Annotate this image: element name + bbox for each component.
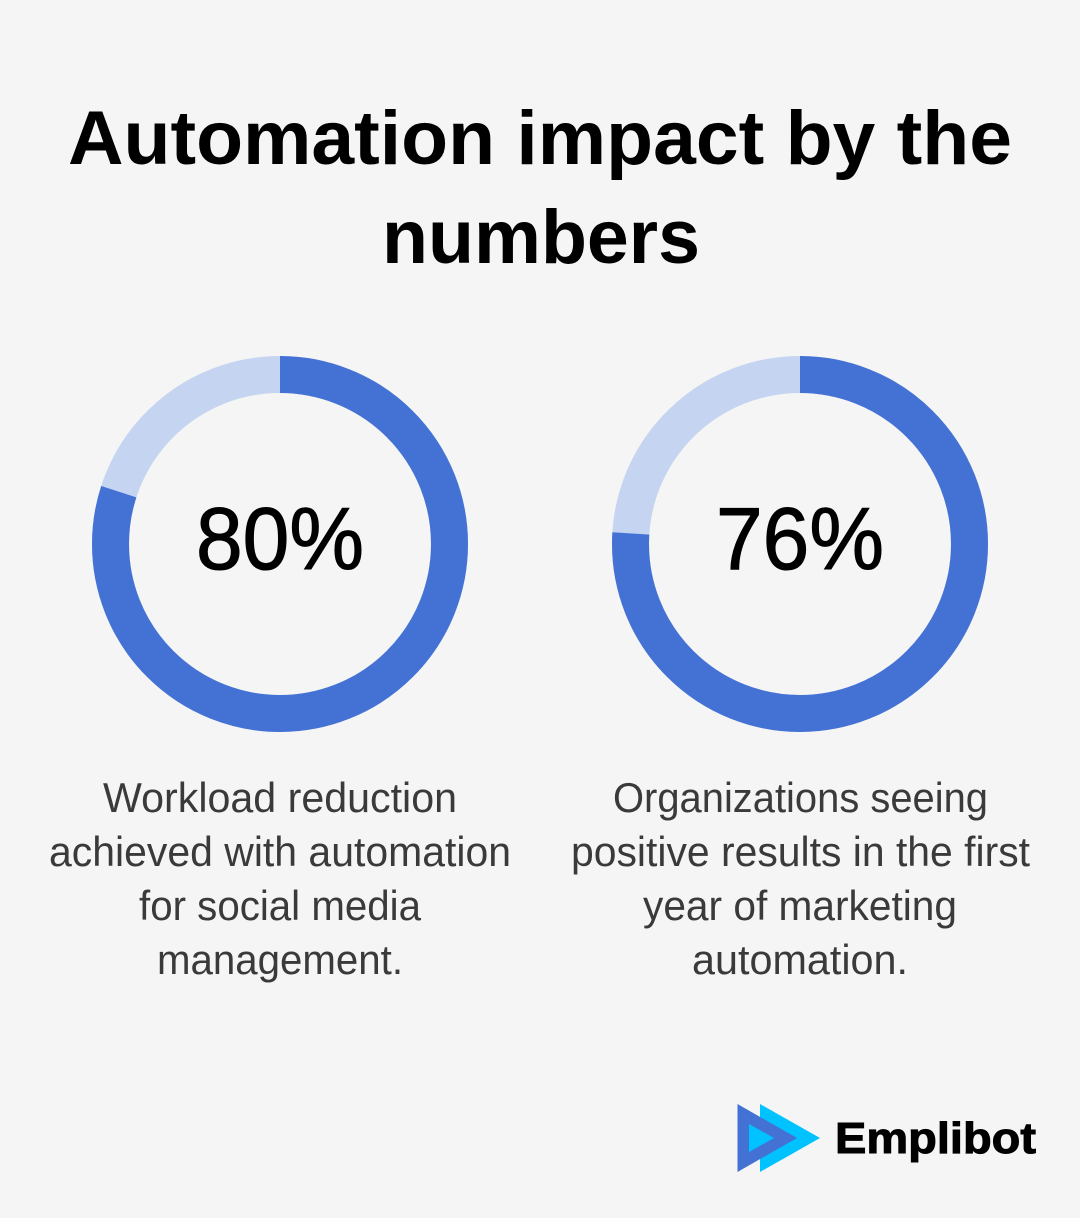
description: workload reduction: for social media: [139, 882, 422, 929]
description: positive results: automation.: [692, 936, 908, 983]
description: workload reduction: [49, 774, 511, 983]
description: workload reduction: management.: [157, 936, 403, 983]
panel: 76% positive results: [571, 374, 1030, 983]
description: positive results: [571, 774, 1030, 983]
description: workload reduction: Workload reduction: [103, 774, 457, 821]
donut chart: 80%: [110, 374, 450, 714]
description: positive results: positive results in the first: [571, 828, 1030, 875]
brand name: Emplibot: [835, 1114, 1036, 1163]
description: positive results: year of marketing: [643, 882, 957, 929]
logo: Emplibot: [738, 1104, 1036, 1172]
icon: play triangles: [738, 1104, 820, 1172]
description: workload reduction: achieved with automation: [49, 828, 511, 875]
panel: 80% workload reduction: [49, 374, 511, 983]
description: positive results: Organizations seeing: [613, 774, 988, 821]
title: Automation impact by the: [68, 96, 1012, 181]
stat value: 76%: 76%: [716, 489, 884, 588]
title: [68, 96, 1012, 280]
title: numbers: [382, 195, 700, 280]
stat value: 80%: 80%: [196, 489, 364, 588]
donut chart: 76%: [630, 374, 970, 714]
